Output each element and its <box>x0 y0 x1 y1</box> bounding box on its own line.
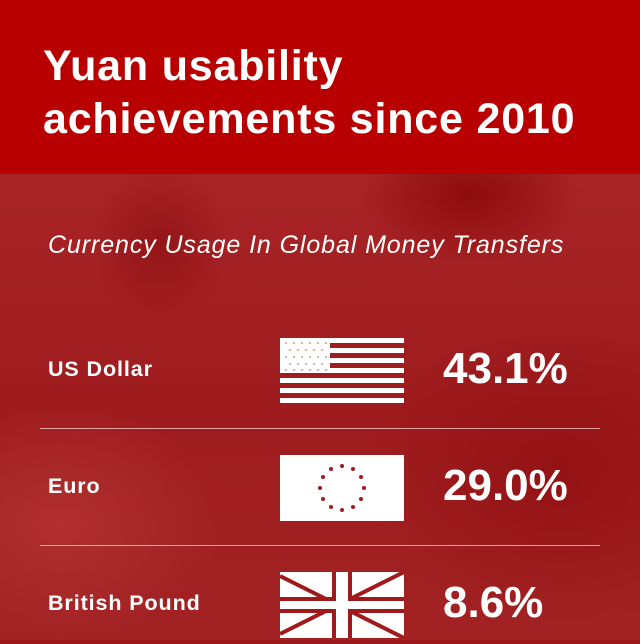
value: 29.0%: 29.0% <box>443 461 568 510</box>
title: Yuan usability <box>43 42 343 90</box>
title <box>43 42 575 143</box>
icon: US flag <box>280 338 404 403</box>
row: US Dollar <box>48 338 568 403</box>
value: 8.6%: 8.6% <box>443 578 543 627</box>
label: British Pound: British Pound <box>48 591 201 615</box>
label: Euro: Euro <box>48 474 101 498</box>
icon: UK flag <box>280 572 404 638</box>
title: achievements since 2010 <box>43 95 575 143</box>
row: British Pound <box>48 572 543 638</box>
header banner <box>0 0 640 174</box>
value: 43.1%: 43.1% <box>443 344 568 393</box>
row: Euro <box>48 455 568 521</box>
label: US Dollar: US Dollar <box>48 357 153 381</box>
icon: EU flag <box>280 455 404 521</box>
subtitle: Currency Usage In Global Money Transfers <box>48 231 564 259</box>
